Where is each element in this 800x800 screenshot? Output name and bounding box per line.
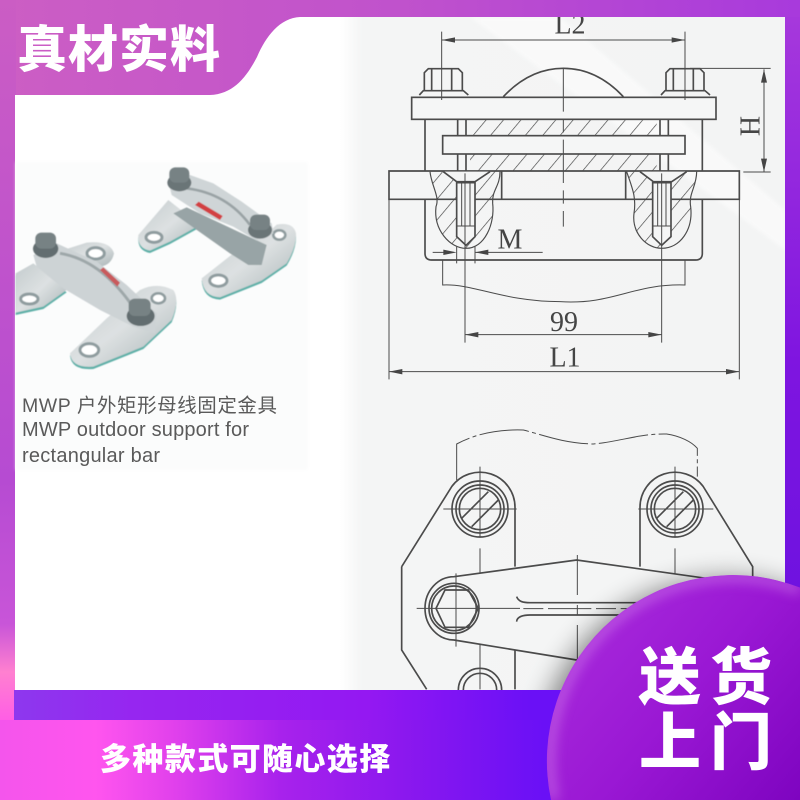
title: genuine materials: 真材实料 (17, 10, 221, 82)
caption: many styles to choose from: 多种款式可随心选择 (100, 734, 392, 779)
bottom band (14, 690, 800, 720)
bracket: upper right (138, 167, 296, 300)
slot lines (517, 597, 638, 622)
centre and dimension lines (389, 32, 771, 379)
badge text: door-to-door delivery (638, 627, 781, 782)
right mounting hole (638, 466, 714, 574)
bolts and nuts (419, 69, 710, 95)
dashed busbar outline (457, 430, 697, 480)
photo caption: MWP outdoor support for (22, 419, 249, 441)
slot centre lines (523, 608, 628, 610)
dimension labels (498, 10, 766, 374)
technical drawing: plan view (402, 430, 753, 707)
hatched bus bar sections (470, 119, 657, 171)
badge text: door-to-door delivery: 送货 (639, 627, 781, 717)
lower mounting hole (458, 668, 502, 690)
clamp lever (425, 560, 713, 660)
dimension labels: M (498, 224, 523, 255)
dimension arrows (389, 37, 767, 374)
left mounting hole (443, 467, 517, 689)
technical drawing: side elevation (389, 10, 771, 379)
photo: pair of MWP brackets (16, 167, 296, 369)
badge: delivery circle (547, 575, 800, 800)
clamp plates (389, 68, 739, 302)
photo caption: MWP 户外矩形母线固定金具 (22, 395, 277, 417)
base plate outline (402, 472, 753, 707)
bracket: lower left (16, 233, 176, 369)
badge text: door-to-door delivery: 上门 (639, 692, 781, 782)
threaded holes and hatched lobes (430, 172, 697, 248)
dimension labels: L1 (549, 343, 581, 374)
top strip covering clipped L2 label (340, 0, 800, 17)
dimension labels: L2 (554, 10, 586, 41)
panel: product photo (16, 162, 308, 470)
photo caption: rectangular bar (22, 445, 160, 467)
panel: scanned paper background (340, 17, 785, 690)
photo caption (22, 395, 277, 467)
badge shadow (534, 560, 785, 690)
dimension labels: H (735, 116, 766, 136)
hex bolt (417, 573, 520, 647)
dimension labels: 99 (550, 307, 578, 338)
